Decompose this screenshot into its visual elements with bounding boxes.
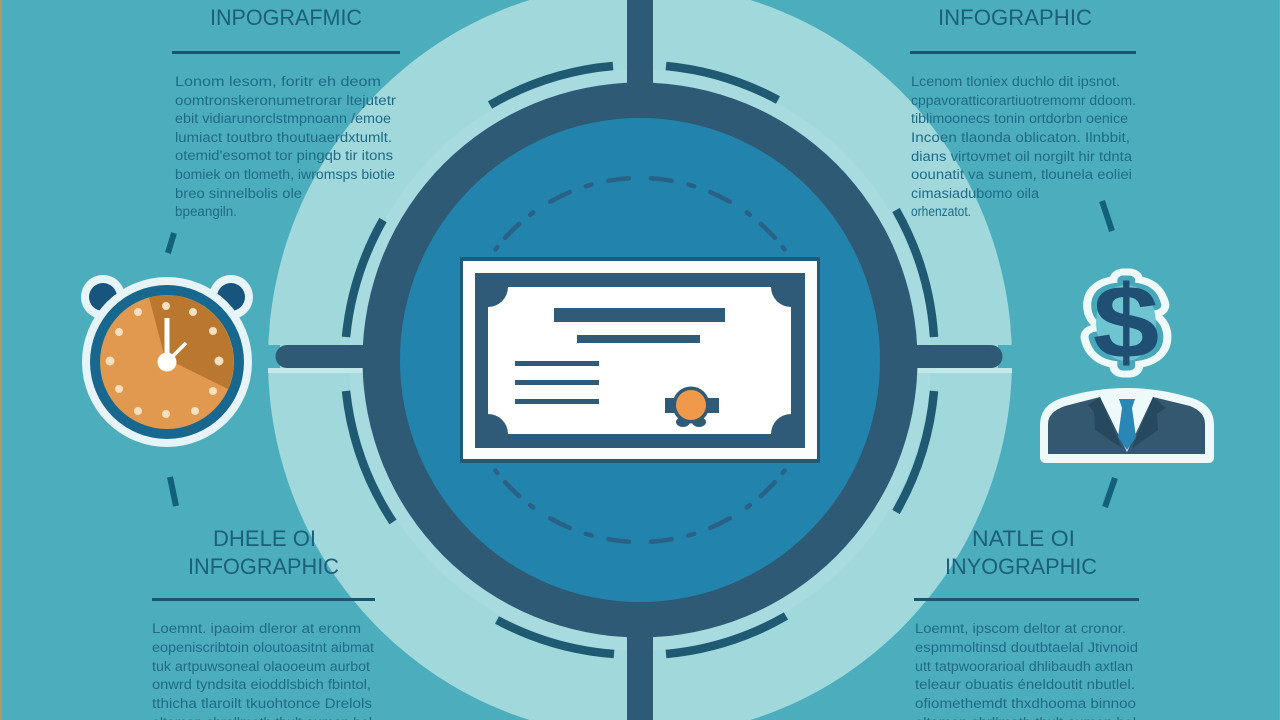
clock dark wedge: [149, 295, 234, 389]
heading: NATLE OI: [972, 526, 1075, 551]
certificate subtitle line: [577, 335, 700, 343]
heading rule: [914, 598, 1139, 601]
certificate seal: [665, 386, 719, 427]
left seam notch: [260, 345, 280, 368]
bottom connector bar: [627, 630, 653, 720]
clock hands: [158, 318, 186, 372]
body text: Loemnt, ipscom deltor at cronor.: [915, 621, 1126, 636]
body text: oounatit va sunem, tlounela eoliei: [911, 167, 1132, 182]
body text: teleaur obuatis éneldoutit nbutlel.: [915, 677, 1135, 692]
dollar sign: $: [1093, 264, 1159, 380]
body text: tthicha tlaroilt tkuohtonce Drelols: [152, 696, 372, 711]
body text: ofiomethemdt thxdhooma binnoo: [915, 696, 1136, 711]
body text: tiblimoonecs tonin ortdorbn oenice: [911, 111, 1128, 126]
businessman suit outline: [1040, 388, 1214, 463]
certificate white mat: [463, 261, 817, 459]
clock blue rim: [90, 285, 244, 439]
certificate outer frame: [460, 257, 820, 463]
body text: [911, 74, 1136, 219]
body text: otemid'esomot tor pingqb tir itons: [175, 148, 393, 163]
body text: breo sinnelbolis ole: [175, 186, 302, 201]
top connector bar: [627, 0, 653, 90]
certificate title line: [554, 308, 725, 322]
body text: tuk artpuwsoneal olaooeum aurbot: [152, 659, 370, 674]
heading: [188, 526, 339, 579]
dollar sign: $: [1093, 264, 1159, 380]
body text: eopeniscribtoin oloutoasitnt aibmat: [152, 640, 374, 655]
right seam highlight: [917, 368, 1012, 373]
heading: INFOGRAPHIC: [188, 554, 339, 579]
left connector bar: [276, 345, 370, 368]
central circular diagram: [260, 0, 1018, 720]
body text: [152, 621, 374, 720]
heading: DHELE OI: [213, 526, 316, 551]
body text: cimasiadubomo oila: [911, 186, 1040, 201]
body text: bpeangiln.: [175, 204, 237, 219]
body text: ebit vidiarunorclstmpnoann /emoe: [175, 111, 391, 126]
dark ring: [362, 82, 918, 638]
right seam notch: [998, 345, 1018, 368]
body text: oomtronskeronumetrorar ltejutetr: [175, 93, 397, 108]
icon: certificate: [460, 257, 820, 463]
text panel: bottom right: [914, 526, 1139, 720]
body text: Loemnt. ipaoim dleror at eronm: [152, 621, 361, 636]
body text: cppavoratticorartiuotremomr ddoom.: [911, 93, 1136, 108]
heading: INYOGRAPHIC: [945, 554, 1097, 579]
outer light circle: [268, 0, 1012, 720]
body text: Lcenom tloniex duchlo dit ipsnot.: [911, 74, 1120, 89]
certificate dark border: [475, 273, 805, 448]
inner light band: [349, 69, 931, 651]
left seam highlight: [268, 368, 363, 373]
heading: INPOGRAFMIC: [210, 5, 362, 30]
businessman lapels: [1088, 397, 1166, 448]
right connector bar: [910, 345, 1002, 368]
body text: lumiact toutbro thoutuaerdxtumlt.: [175, 130, 392, 145]
body text: onwrd tyndsita eioddlsbich fbintol,: [152, 677, 371, 692]
businessman suit jacket: [1048, 397, 1205, 454]
clock body: [82, 277, 252, 447]
heading rule: [152, 598, 375, 601]
certificate text lines: [515, 361, 599, 404]
clock face: [100, 295, 234, 429]
thin arc segments: [346, 66, 934, 654]
icon: clock: [81, 275, 253, 447]
heading: INFOGRAPHIC: [938, 5, 1092, 30]
businessman tie: [1118, 399, 1136, 450]
blue inner disc: [400, 118, 880, 602]
body text: bomiek on tlometh, iwromsps biotie: [175, 167, 395, 182]
text panel: top left: [172, 5, 400, 219]
body text: [915, 621, 1138, 720]
clock ears: [81, 275, 253, 319]
text panel: top right: [910, 5, 1136, 219]
certificate paper: [488, 287, 791, 434]
body text: orhenzatot.: [911, 204, 971, 219]
accent ticks: [168, 201, 1115, 507]
text panel: bottom left: [152, 526, 375, 720]
icon: dollar and businessman: [1040, 264, 1214, 463]
dashed circle: [482, 178, 798, 542]
body text: Incoen tlaonda oblicaton. Ilnbbit,: [911, 130, 1130, 145]
clock hour marks: [106, 302, 224, 418]
body text: dians virtovmet oil norgilt hir tdnta: [911, 149, 1133, 164]
body text: Lonom lesom, foritr eh deom: [175, 74, 381, 89]
heading rule: [172, 51, 400, 54]
dollar sign: $: [1093, 264, 1159, 380]
body text: utt tatpwoorarioal dhlibaudh axtlan: [915, 659, 1133, 674]
body text: [175, 74, 397, 219]
body text: espmmoltinsd doutbtaelal Jtivnoid: [915, 640, 1138, 655]
heading: [945, 526, 1097, 579]
heading rule: [910, 51, 1136, 54]
